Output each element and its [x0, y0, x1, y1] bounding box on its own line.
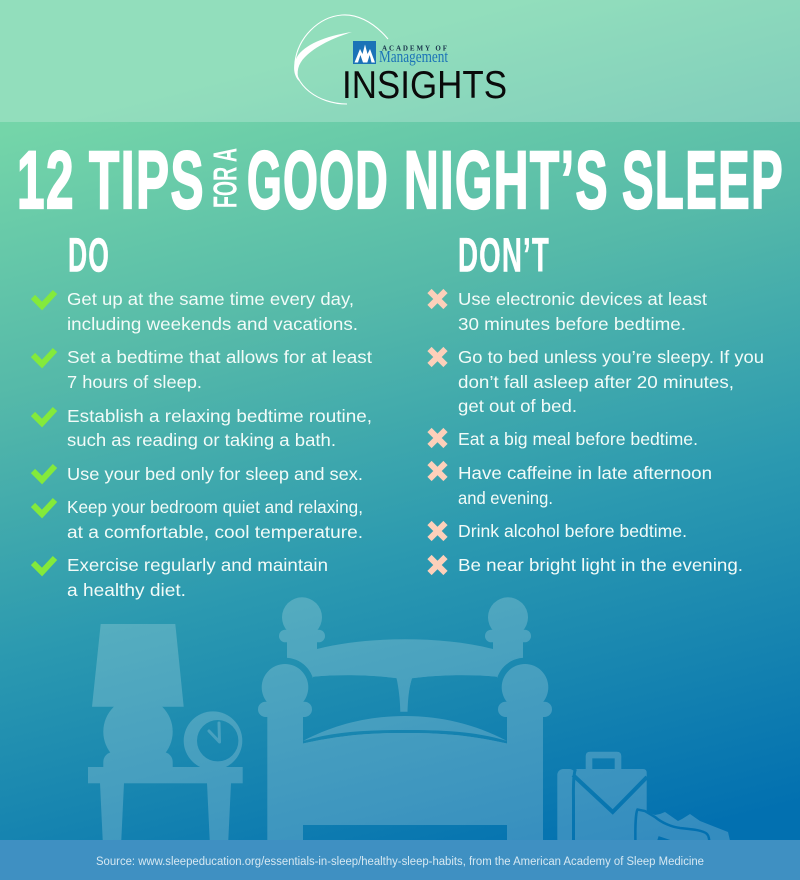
- do list text: Keep your bedroom quiet and relaxing,: [67, 497, 363, 517]
- title: night's: NIGHT’S: [404, 135, 609, 226]
- don't list text: Have caffeine in late afternoon: [458, 463, 712, 483]
- logo orbit line: [295, 15, 388, 104]
- don't list text: [458, 289, 764, 575]
- title: for a: FOR A: [206, 148, 244, 208]
- do list text: Set a bedtime that allows for at least: [67, 347, 372, 367]
- source text: Source: www.sleepeducation.org/essentials-in-sleep/healthy-sleep-habits, from the American Academy of Sleep Medicine: [96, 856, 704, 868]
- do list text: [67, 289, 372, 600]
- don't list text: Drink alcohol before bedtime.: [458, 521, 687, 541]
- do list text: a healthy diet.: [67, 580, 186, 600]
- don't list text: don’t fall asleep after 20 minutes,: [458, 372, 734, 392]
- title: good: GOOD: [247, 135, 389, 226]
- don't list text: Use electronic devices at least: [458, 289, 707, 309]
- icon: check marks: [33, 292, 55, 572]
- title: 12: 12: [17, 135, 75, 226]
- heading: don't: DON’T: [458, 230, 550, 282]
- logo academy text: ACADEMY OF: [382, 45, 447, 53]
- panel: do: [33, 230, 372, 600]
- don't list text: Eat a big meal before bedtime.: [458, 429, 698, 449]
- do list text: Get up at the same time every day,: [67, 289, 354, 309]
- don't list text: get out of bed.: [458, 396, 577, 416]
- footer band: [0, 840, 800, 880]
- header band: [0, 0, 800, 122]
- don't list text: 30 minutes before bedtime.: [458, 314, 686, 334]
- title: [17, 135, 784, 226]
- icon: cross marks: [430, 291, 446, 573]
- logo: Academy of Management Insights: [294, 15, 507, 107]
- do list text: such as reading or taking a bath.: [67, 430, 336, 450]
- don't list text: and evening.: [458, 488, 553, 508]
- logo management text: Management: [379, 47, 448, 66]
- do list text: Use your bed only for sleep and sex.: [67, 464, 363, 484]
- do list text: including weekends and vacations.: [67, 314, 358, 334]
- don't list text: Go to bed unless you’re sleepy. If you: [458, 347, 764, 367]
- logo swoosh: [294, 32, 352, 81]
- panel: don't: [430, 230, 764, 575]
- logo insights text: INSIGHTS: [342, 64, 507, 107]
- do list text: at a comfortable, cool temperature.: [67, 522, 363, 542]
- do list text: Exercise regularly and maintain: [67, 555, 328, 575]
- illustration: bedroom silhouette: [88, 597, 730, 840]
- logo mountain box: [353, 41, 376, 64]
- heading: do: DO: [68, 230, 110, 282]
- do list text: 7 hours of sleep.: [67, 372, 202, 392]
- title: tips: TIPS: [89, 135, 205, 226]
- don't list text: Be near bright light in the evening.: [458, 555, 743, 575]
- do list text: Establish a relaxing bedtime routine,: [67, 406, 372, 426]
